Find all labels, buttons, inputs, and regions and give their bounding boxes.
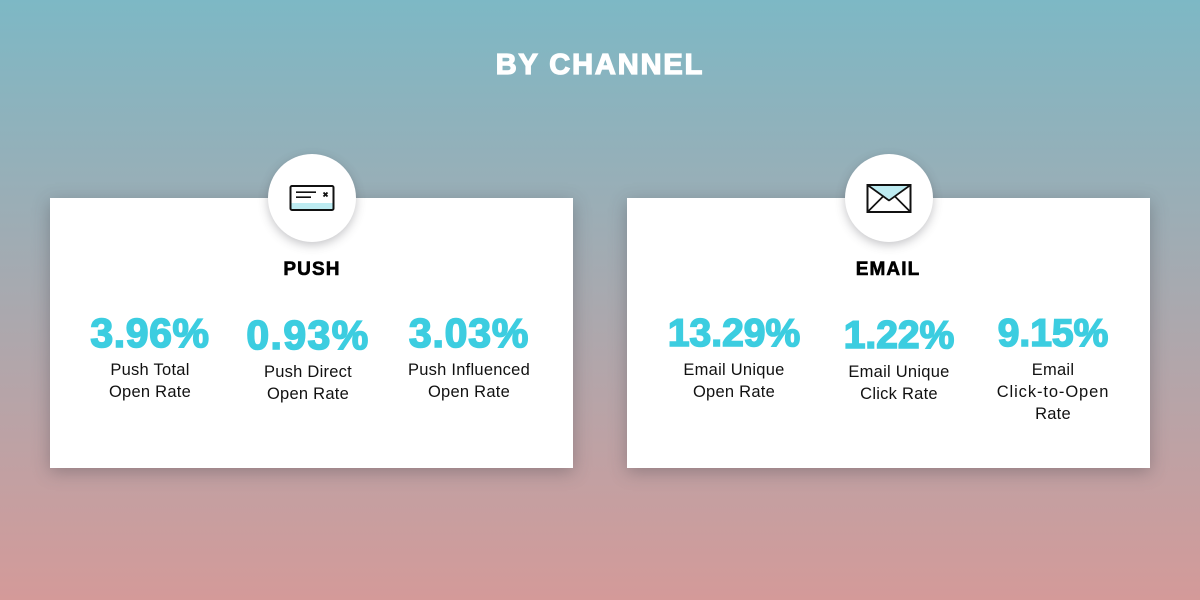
stat: push total open rate: Open Rate	[109, 383, 191, 401]
heading: push: PUSH	[283, 259, 341, 280]
icon: push notification	[268, 154, 356, 242]
stat: email click-to-open rate: Rate	[1035, 405, 1071, 423]
icon: envelope	[845, 154, 933, 242]
stat: email unique open rate: 13.29%	[668, 312, 800, 355]
stat: push total open rate: 3.96%	[90, 310, 210, 356]
stat: push direct open rate	[246, 312, 370, 403]
title: BY CHANNEL	[496, 49, 704, 81]
stat: push influenced open rate: Open Rate	[428, 383, 510, 401]
stat: email unique open rate: Open Rate	[693, 383, 775, 401]
stat: email unique click rate	[844, 314, 954, 403]
stat: email click-to-open rate	[997, 312, 1109, 423]
stat: email click-to-open rate: 9.15%	[998, 312, 1108, 355]
stat: email unique click rate: Click Rate	[860, 385, 938, 403]
stat: email unique open rate	[668, 312, 800, 401]
heading: email: EMAIL	[856, 259, 920, 280]
stat: push influenced open rate	[408, 310, 530, 401]
stat: email unique open rate: Email Unique	[683, 361, 785, 379]
panel: push	[50, 198, 573, 468]
stat: push total open rate	[90, 310, 210, 401]
stat: push direct open rate: Open Rate	[267, 385, 349, 403]
stat: email click-to-open rate: Click-to-Open	[997, 383, 1109, 401]
stat: email click-to-open rate: Email	[1032, 361, 1074, 379]
stat: email unique click rate: Email Unique	[848, 363, 950, 381]
stat: email unique click rate: 1.22%	[844, 314, 954, 357]
stat: push total open rate: Push Total	[110, 361, 190, 379]
stat: push influenced open rate: 3.03%	[409, 310, 529, 356]
stat: push direct open rate: 0.93%	[246, 312, 370, 358]
stat: push influenced open rate: Push Influenced	[408, 361, 530, 379]
stat: push direct open rate: Push Direct	[264, 363, 352, 381]
panel: email	[627, 198, 1150, 468]
